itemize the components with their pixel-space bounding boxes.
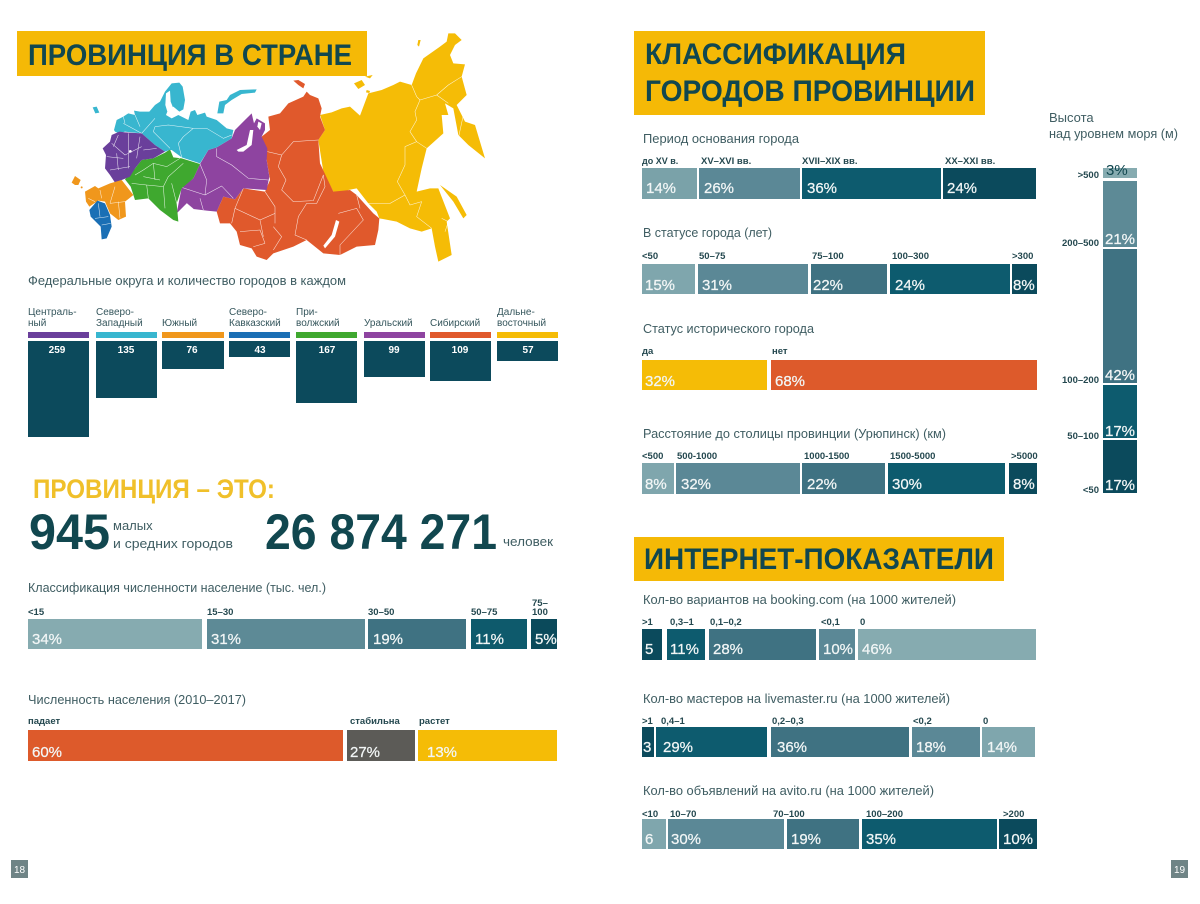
chart: cities by federal district: волжский — [296, 318, 340, 329]
title: internet indicators: ИНТЕРНЕТ-ПОКАЗАТЕЛИ — [644, 543, 994, 576]
chart: altitude: >500 — [1078, 170, 1099, 181]
chart: founding period: 24% — [947, 180, 977, 197]
stat: 945 small and medium towns — [29, 504, 233, 560]
chart: cities by federal district: 259 — [49, 345, 66, 356]
chart: years as a town: 15% — [645, 277, 675, 294]
chart: cities by federal district: восточный — [497, 318, 546, 329]
chart: livemaster.ru: <0,2 — [913, 716, 932, 727]
region: Volga — [125, 149, 200, 222]
heading: altitude: над уровнем моря (м) — [1049, 126, 1178, 141]
chart: booking.com: 0 — [860, 617, 865, 628]
page number 19: 19 — [1174, 865, 1185, 876]
chart: livemaster.ru: 18% — [916, 739, 946, 756]
page number 19 — [1171, 860, 1188, 878]
chart: cities by federal district: 167 — [319, 345, 336, 356]
chart: cities by federal district: 135 — [118, 345, 135, 356]
chart: distance to the province capital: 32% — [681, 476, 711, 493]
panel: map of Russia by federal districts — [72, 33, 485, 262]
heading: altitude — [1049, 110, 1178, 141]
region: Central — [103, 132, 165, 183]
chart: booking.com: >1 — [642, 617, 654, 628]
stat: 945 small and medium towns: малых — [113, 518, 153, 533]
chart: booking.com — [642, 617, 1036, 660]
chart: avito.ru: 6 — [645, 831, 653, 848]
chart: years as a town: >300 — [1012, 251, 1033, 262]
chart: population classification: 50–75 — [471, 607, 498, 618]
heading: population classification: Классификация численности население (тыс. чел.) — [28, 580, 326, 595]
chart: population change — [28, 716, 557, 761]
chart: population change: растет — [419, 716, 450, 727]
chart: livemaster.ru: 0,4–1 — [661, 716, 685, 727]
chart: years as a town: 8% — [1013, 277, 1035, 294]
chart: founding period: 36% — [807, 180, 837, 197]
chart: livemaster.ru — [642, 716, 1035, 757]
chart: cities by federal district: Южный — [162, 318, 197, 329]
heading: historic town status: Статус исторического города — [643, 321, 815, 336]
chart: years as a town: 24% — [895, 277, 925, 294]
chart: cities by federal district — [28, 307, 558, 437]
chart: distance to the province capital: 500-1000 — [677, 451, 717, 462]
chart: altitude: 17% — [1105, 423, 1135, 440]
region: Far Eastern — [318, 33, 485, 262]
heading: booking.com: Кол-во вариантов на booking.com (на 1000 жителей) — [643, 592, 956, 607]
heading: livemaster.ru: Кол-во мастеров на livemaster.ru (на 1000 жителей) — [643, 691, 950, 706]
heading: distance to the province capital: Расстояние до столицы провинции (Урюпинск) (км) — [643, 426, 946, 441]
chart: founding period: до XV в. — [642, 156, 678, 166]
chart: years as a town: 31% — [702, 277, 732, 294]
chart: population classification: <15 — [28, 607, 45, 618]
chart: cities by federal district: Кавказский — [229, 318, 281, 329]
stat: 26 874 271 people: 26 874 271 — [265, 504, 497, 560]
chart: avito.ru: 70–100 — [773, 809, 805, 820]
stat: 945 small and medium towns: 945 — [29, 504, 110, 560]
region: Ural — [177, 113, 269, 213]
chart: altitude: 42% — [1105, 367, 1135, 384]
region: Northwestern — [93, 83, 257, 163]
chart: livemaster.ru: 0 — [983, 716, 988, 727]
chart: livemaster.ru: >1 — [642, 716, 654, 727]
chart: population classification: 75– — [532, 598, 548, 609]
chart: historic town status: 32% — [645, 373, 675, 390]
chart: founding period: 26% — [704, 180, 734, 197]
chart: years as a town — [642, 251, 1037, 294]
chart: years as a town: 100–300 — [892, 251, 929, 262]
chart: founding period: XX–XXI вв. — [945, 156, 995, 167]
chart: distance to the province capital: 22% — [807, 476, 837, 493]
region: Siberian — [217, 80, 379, 260]
chart: historic town status: 68% — [775, 373, 805, 390]
heading: years as a town: В статусе города (лет) — [643, 225, 772, 240]
chart: livemaster.ru: 14% — [987, 739, 1017, 756]
chart: avito.ru: 35% — [866, 831, 896, 848]
chart: population change: 60% — [32, 744, 62, 761]
chart: population change: 27% — [350, 744, 380, 761]
chart: years as a town: <50 — [642, 251, 658, 262]
chart: cities by federal district: Сибирский — [430, 317, 480, 329]
page number 18: 18 — [14, 865, 25, 876]
chart: cities by federal district: Дальне- — [497, 307, 535, 318]
chart: livemaster.ru: 29% — [663, 739, 693, 756]
title: classification of province towns — [634, 31, 985, 115]
chart: cities by federal district: 109 — [452, 345, 469, 356]
chart: altitude — [1062, 162, 1137, 496]
chart: avito.ru — [642, 809, 1037, 849]
chart: cities by federal district: Западный — [96, 318, 143, 329]
chart: historic town status: да — [642, 346, 654, 357]
title: classification of province towns: ГОРОДОВ ПРОВИНЦИИ — [645, 75, 975, 108]
region: North Caucasian — [89, 201, 112, 239]
heading: population change: Численность населения (2010–2017) — [28, 692, 246, 707]
chart: cities by federal district: При- — [296, 307, 318, 318]
chart: population classification: 34% — [32, 631, 62, 648]
chart: booking.com: 0,1–0,2 — [710, 617, 742, 628]
title: classification of province towns: КЛАССИФИКАЦИЯ — [645, 38, 906, 71]
chart: cities by federal district: ный — [28, 318, 46, 329]
chart: years as a town: 22% — [813, 277, 843, 294]
chart: altitude: 50–100 — [1067, 431, 1099, 442]
chart: population change: 13% — [427, 744, 457, 761]
heading: founding period: Период основания города — [643, 131, 800, 146]
chart: altitude: 200–500 — [1062, 238, 1099, 249]
chart: booking.com: 46% — [862, 641, 892, 658]
chart: altitude: <50 — [1083, 485, 1099, 496]
title: province in the country: ПРОВИНЦИЯ В СТРАНЕ — [28, 39, 352, 72]
chart: historic town status — [642, 346, 1037, 390]
chart: cities by federal district: Северо- — [229, 307, 267, 318]
chart: booking.com: 5 — [645, 641, 653, 658]
stat: 945 small and medium towns: и средних городов — [113, 536, 233, 551]
chart: altitude: 100–200 — [1062, 375, 1099, 386]
chart: cities by federal district: 57 — [522, 345, 534, 356]
chart: distance to the province capital: 1500-5000 — [890, 451, 935, 462]
chart: founding period: 14% — [646, 180, 676, 197]
chart: distance to the province capital: 8% — [645, 476, 667, 493]
chart: cities by federal district: 76 — [186, 345, 198, 356]
heading: altitude: Высота — [1049, 110, 1094, 125]
heading: federal districts: Федеральные округа и количество городов в каждом — [28, 273, 346, 288]
chart: avito.ru: 10% — [1003, 831, 1033, 848]
chart: avito.ru: 19% — [791, 831, 821, 848]
chart: booking.com: 10% — [823, 641, 853, 658]
chart: avito.ru: 100–200 — [866, 809, 903, 820]
chart: cities by federal district: Северо- — [96, 307, 134, 318]
chart: population classification: 31% — [211, 631, 241, 648]
chart: cities by federal district: 43 — [254, 345, 266, 356]
chart: livemaster.ru: 3 — [643, 739, 651, 756]
chart: population classification: 15–30 — [207, 607, 233, 618]
chart: avito.ru: 10–70 — [670, 809, 696, 820]
stat: 26 874 271 people: человек — [503, 534, 553, 549]
chart: booking.com: 28% — [713, 641, 743, 658]
heading: province is: ПРОВИНЦИЯ – ЭТО: — [33, 474, 275, 504]
region: Southern — [72, 176, 133, 220]
page number 18 — [11, 860, 28, 878]
chart: founding period: XVII–XIX вв. — [802, 156, 858, 167]
chart: altitude: 21% — [1105, 231, 1135, 248]
chart: cities by federal district: Уральский — [364, 318, 413, 329]
chart: distance to the province capital: 30% — [892, 476, 922, 493]
chart: distance to the province capital: 8% — [1013, 476, 1035, 493]
chart: population classification: 30–50 — [368, 607, 394, 618]
chart: avito.ru: 30% — [671, 831, 701, 848]
chart: founding period: XV–XVI вв. — [701, 156, 751, 167]
chart: population change: падает — [28, 716, 60, 727]
chart: altitude: 3% — [1106, 162, 1128, 179]
chart: cities by federal district: 99 — [388, 345, 400, 356]
chart: historic town status: нет — [772, 346, 788, 357]
chart: avito.ru: >200 — [1003, 809, 1024, 820]
chart: booking.com: <0,1 — [821, 617, 840, 628]
chart: altitude: 17% — [1105, 477, 1135, 494]
chart: distance to the province capital: <500 — [642, 451, 663, 462]
chart: distance to the province capital: >5000 — [1011, 451, 1038, 462]
chart: booking.com: 0,3–1 — [670, 617, 694, 628]
chart: population classification: 100 — [532, 607, 548, 618]
chart: years as a town: 50–75 — [699, 251, 726, 262]
chart: population classification: 19% — [373, 631, 403, 648]
heading: avito.ru: Кол-во объявлений на avito.ru (на 1000 жителей) — [643, 783, 934, 798]
chart: cities by federal district: Централь- — [28, 307, 77, 318]
chart: distance to the province capital — [642, 451, 1038, 494]
chart: booking.com: 11% — [670, 641, 699, 658]
chart: livemaster.ru: 0,2–0,3 — [772, 716, 804, 727]
chart: population classification: 11% — [475, 631, 504, 648]
chart: population classification — [28, 598, 557, 649]
chart: avito.ru: <10 — [642, 809, 658, 820]
chart: population change: стабильна — [350, 716, 401, 727]
chart: years as a town: 75–100 — [812, 251, 844, 262]
title: province in the country — [17, 31, 367, 76]
chart: founding period — [642, 156, 1036, 199]
chart: population classification: 5% — [535, 631, 557, 648]
chart: distance to the province capital: 1000-1500 — [804, 451, 849, 462]
chart: livemaster.ru: 36% — [777, 739, 807, 756]
